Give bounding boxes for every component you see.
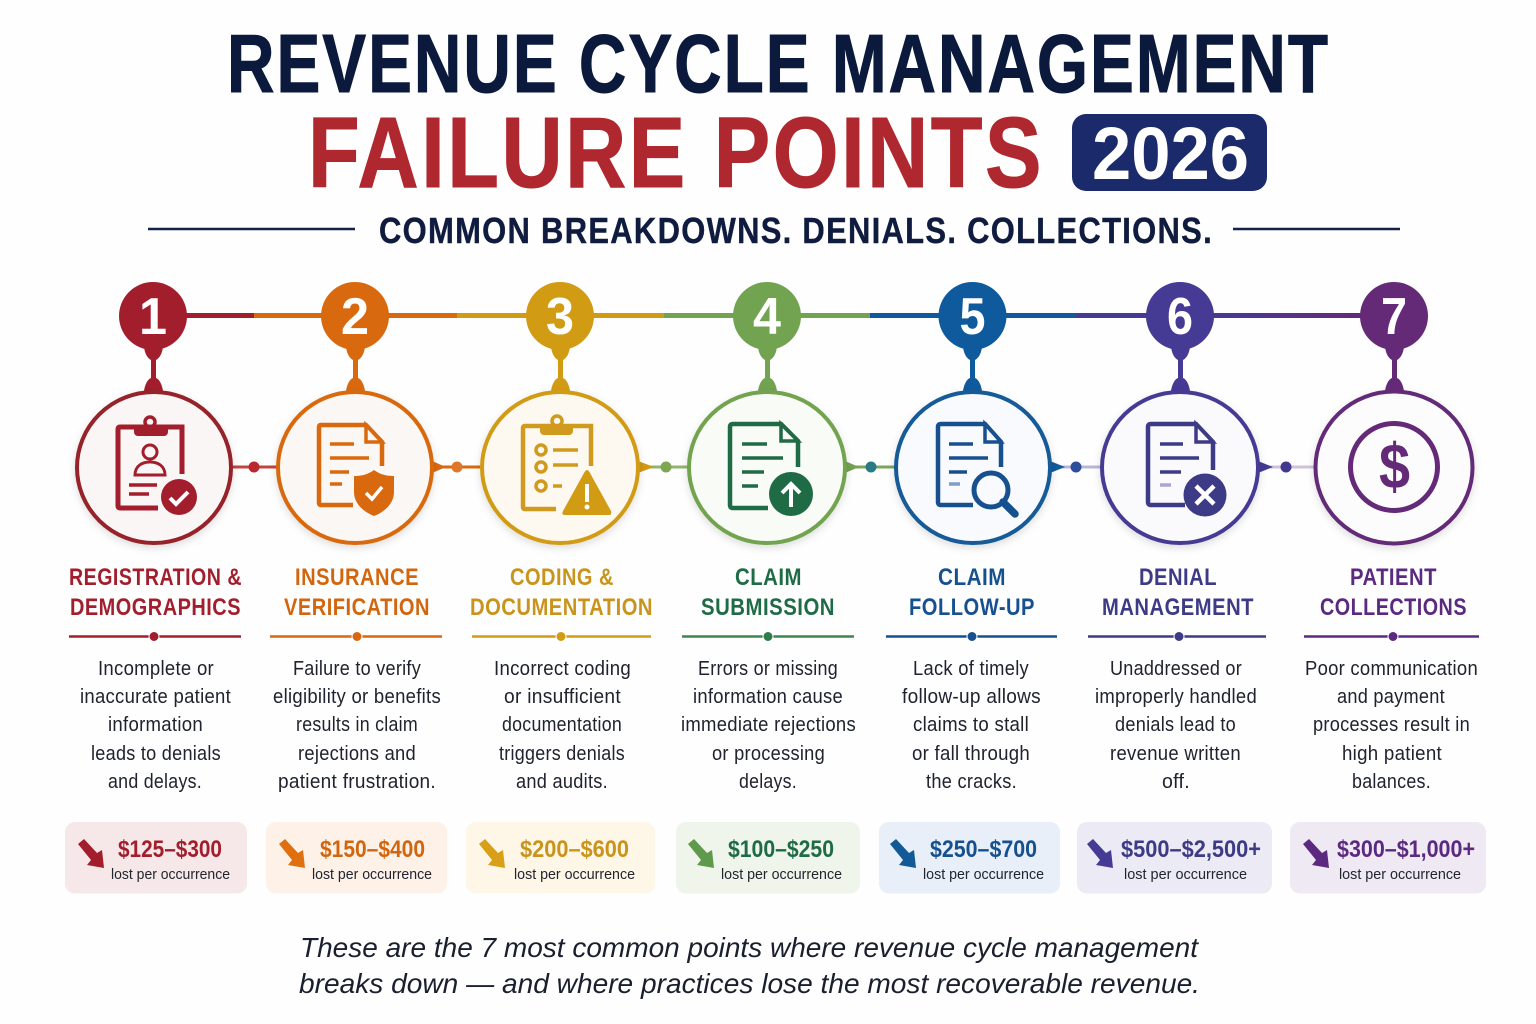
heading [909, 564, 1035, 621]
loss card: lost per occurrence [312, 866, 432, 883]
loss card: lost per occurrence [923, 866, 1044, 883]
heading [470, 564, 653, 621]
heading [1320, 564, 1467, 621]
loss card [466, 822, 655, 894]
number badge 7: 7 [1381, 288, 1407, 346]
number badge 5 [938, 282, 1006, 391]
loss card: lost per occurrence [111, 866, 230, 883]
loss card: $300–$1,000+ [1337, 836, 1475, 863]
step 5: claim follow-up [879, 282, 1060, 894]
heading [284, 564, 430, 621]
number badge 4: 4 [753, 288, 781, 346]
description: delays. [739, 771, 797, 793]
description [80, 658, 231, 793]
heading: CODING & [510, 564, 614, 591]
side connectors between circles [233, 461, 1314, 473]
heading: INSURANCE [295, 564, 419, 591]
loss card: $100–$250 [728, 836, 834, 863]
description: and audits. [516, 771, 608, 793]
heading: DEMOGRAPHICS [70, 594, 241, 621]
icon circle: document with magnifier [896, 392, 1050, 543]
number badge 7 [1360, 282, 1428, 391]
number badge 6: 6 [1167, 288, 1193, 346]
description: improperly handled [1095, 686, 1257, 708]
divider [1304, 632, 1479, 642]
divider [69, 632, 241, 642]
divider [472, 632, 651, 642]
description: revenue written [1110, 743, 1241, 765]
loss card: $150–$400 [320, 836, 425, 863]
description: Poor communication [1305, 658, 1478, 680]
description: triggers denials [499, 743, 625, 765]
number badge 1 [119, 282, 187, 391]
description [494, 658, 631, 793]
heading: DOCUMENTATION [470, 594, 653, 621]
heading: REGISTRATION & [69, 564, 242, 591]
icon circle: checklist with warning [482, 392, 638, 543]
heading [69, 564, 242, 621]
description: Errors or missing [698, 658, 838, 680]
step 6: denial management [1077, 282, 1272, 894]
description: rejections and [298, 743, 416, 765]
description: claims to stall [913, 714, 1029, 736]
description: and delays. [108, 771, 202, 793]
heading: CLAIM [938, 564, 1006, 591]
footer note: breaks down — and where practices lose the most recoverable revenue. [299, 968, 1200, 999]
heading: DENIAL [1139, 564, 1217, 591]
loss card: lost per occurrence [1339, 866, 1461, 883]
heading: PATIENT [1350, 564, 1437, 591]
step 7: patient collections [1290, 282, 1486, 894]
description: follow-up allows [902, 686, 1041, 708]
description: Incorrect coding [494, 658, 631, 680]
description: and payment [1337, 686, 1445, 708]
loss card [676, 822, 860, 894]
number badge 2 [321, 282, 389, 391]
loss card: lost per occurrence [721, 866, 842, 883]
description: results in claim [296, 714, 418, 736]
description: leads to denials [91, 743, 221, 765]
description: eligibility or benefits [273, 686, 441, 708]
divider [1088, 632, 1266, 642]
timeline connector [180, 313, 1365, 318]
icon circle: document with cross [1102, 392, 1258, 543]
number badge 6 [1146, 282, 1214, 391]
number badge 3 [526, 282, 594, 391]
footer note [299, 932, 1200, 999]
description [273, 658, 441, 793]
number badge 3: 3 [546, 288, 574, 346]
subtitle: COMMON BREAKDOWNS. DENIALS. COLLECTIONS. [379, 210, 1213, 251]
description: Lack of timely [913, 658, 1029, 680]
description [902, 658, 1041, 793]
heading: COLLECTIONS [1320, 594, 1467, 621]
description: information cause [693, 686, 843, 708]
description [681, 658, 856, 793]
description: Unaddressed or [1110, 658, 1242, 680]
heading: MANAGEMENT [1102, 594, 1254, 621]
description: immediate rejections [681, 714, 856, 736]
heading [701, 564, 835, 621]
icon circle: dollar coin: $ [1379, 430, 1410, 502]
divider [270, 632, 442, 642]
loss card [1077, 822, 1272, 894]
description [1305, 658, 1478, 793]
icon circle: document with upload [689, 392, 845, 543]
heading: CLAIM [735, 564, 802, 591]
number badge 5: 5 [960, 288, 986, 346]
number badge 1: 1 [139, 288, 167, 346]
step 1: registration and demographics [65, 282, 247, 894]
loss card [879, 822, 1060, 894]
step 2: insurance verification [266, 282, 447, 894]
description: or insufficient [504, 686, 621, 708]
loss card: lost per occurrence [514, 866, 635, 883]
loss card: lost per occurrence [1124, 866, 1247, 883]
loss card [266, 822, 447, 894]
description: patient frustration. [278, 771, 436, 793]
icon circle: clipboard with person and check [77, 392, 231, 543]
heading: FOLLOW-UP [909, 594, 1035, 621]
heading: SUBMISSION [701, 594, 835, 621]
description: the cracks. [926, 771, 1017, 793]
number badge 4 [733, 282, 801, 391]
description: Incomplete or [98, 658, 214, 680]
loss card: $125–$300 [118, 836, 222, 863]
divider [886, 632, 1057, 642]
description: denials lead to [1115, 714, 1236, 736]
heading [1102, 564, 1254, 621]
loss card: $200–$600 [520, 836, 629, 863]
title line 2: FAILURE POINTS [308, 97, 1044, 209]
divider [682, 632, 854, 642]
title [227, 17, 1330, 209]
description: Failure to verify [293, 658, 421, 680]
description: or fall through [912, 743, 1030, 765]
description: off. [1162, 771, 1190, 793]
step 4: claim submission [676, 282, 860, 894]
description: documentation [502, 714, 622, 736]
description: high patient [1342, 743, 1442, 765]
step 3: coding and documentation [466, 282, 655, 894]
description: inaccurate patient [80, 686, 231, 708]
loss card [1290, 822, 1486, 894]
icon circle: document with shield [278, 392, 432, 543]
number badge 2: 2 [341, 288, 369, 346]
description: or processing [712, 743, 825, 765]
description: balances. [1352, 771, 1431, 793]
footer note: These are the 7 most common points where revenue cycle management [300, 932, 1199, 963]
heading: VERIFICATION [284, 594, 430, 621]
icon circle: dollar coin [1316, 392, 1472, 544]
loss card [65, 822, 247, 894]
loss card: $250–$700 [930, 836, 1037, 863]
description [1095, 658, 1257, 793]
description: information [108, 714, 203, 736]
loss card: $500–$2,500+ [1121, 836, 1261, 863]
year badge: 2026 [1092, 112, 1249, 195]
description: processes result in [1313, 714, 1470, 736]
